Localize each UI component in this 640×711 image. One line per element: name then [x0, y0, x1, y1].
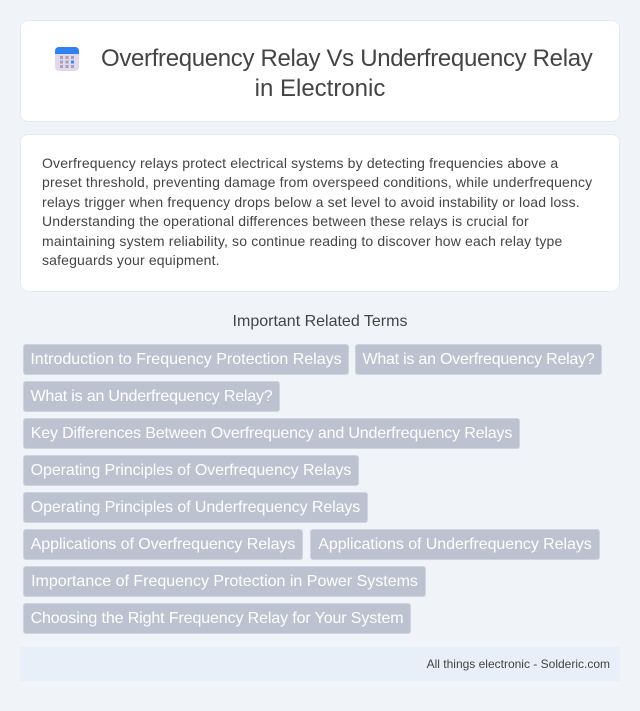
intro paragraph [42, 155, 592, 268]
intro paragraph: Understanding the operational differences between these relays is crucial for [42, 213, 529, 229]
footer bar [20, 647, 620, 681]
intro paragraph: Overfrequency relays protect electrical systems by detecting frequencies above a [42, 155, 558, 171]
tag: Applications of Overfrequency Relays [31, 536, 295, 553]
panel: related term tags [23, 344, 602, 634]
tag: What is an Underfrequency Relay? [30, 388, 273, 405]
intro paragraph: preset threshold, preventing damage from overspeed conditions, while underfrequency [42, 174, 592, 190]
tag: Operating Principles of Underfrequency Relays [31, 499, 360, 516]
tag [23, 381, 280, 412]
tag: Key Differences Between Overfrequency and Underfrequency Relays [31, 425, 512, 442]
tag [23, 492, 368, 523]
icon: calendar [55, 47, 79, 71]
tag [23, 603, 411, 634]
tag: Applications of Underfrequency Relays [318, 536, 592, 553]
tag: Operating Principles of Overfrequency Relays [31, 462, 351, 479]
tag [23, 455, 359, 486]
intro paragraph: maintaining system reliability, so continue reading to discover how each relay type [42, 233, 562, 249]
panel: intro text [20, 134, 620, 292]
tag [23, 529, 303, 560]
tag [355, 344, 602, 375]
tag [310, 529, 600, 560]
heading: related terms: Important Related Terms [233, 313, 407, 330]
tag [23, 566, 426, 597]
tag [23, 344, 349, 375]
tag: What is an Overfrequency Relay? [362, 351, 595, 368]
tag [23, 418, 520, 449]
panel: header [20, 20, 620, 122]
title: in Electronic [255, 75, 385, 102]
tag: Choosing the Right Frequency Relay for Your System [31, 610, 403, 627]
intro paragraph: relays trigger when frequency drops below a set level to avoid instability or load loss. [42, 194, 580, 210]
intro paragraph: safeguards your equipment. [42, 252, 220, 268]
footer text: All things electronic - Solderic.com [427, 657, 610, 671]
tag: Importance of Frequency Protection in Power Systems [31, 573, 418, 590]
title [101, 45, 593, 102]
tag: Introduction to Frequency Protection Relays [30, 351, 342, 368]
title: Overfrequency Relay Vs Underfrequency Relay [101, 45, 592, 72]
